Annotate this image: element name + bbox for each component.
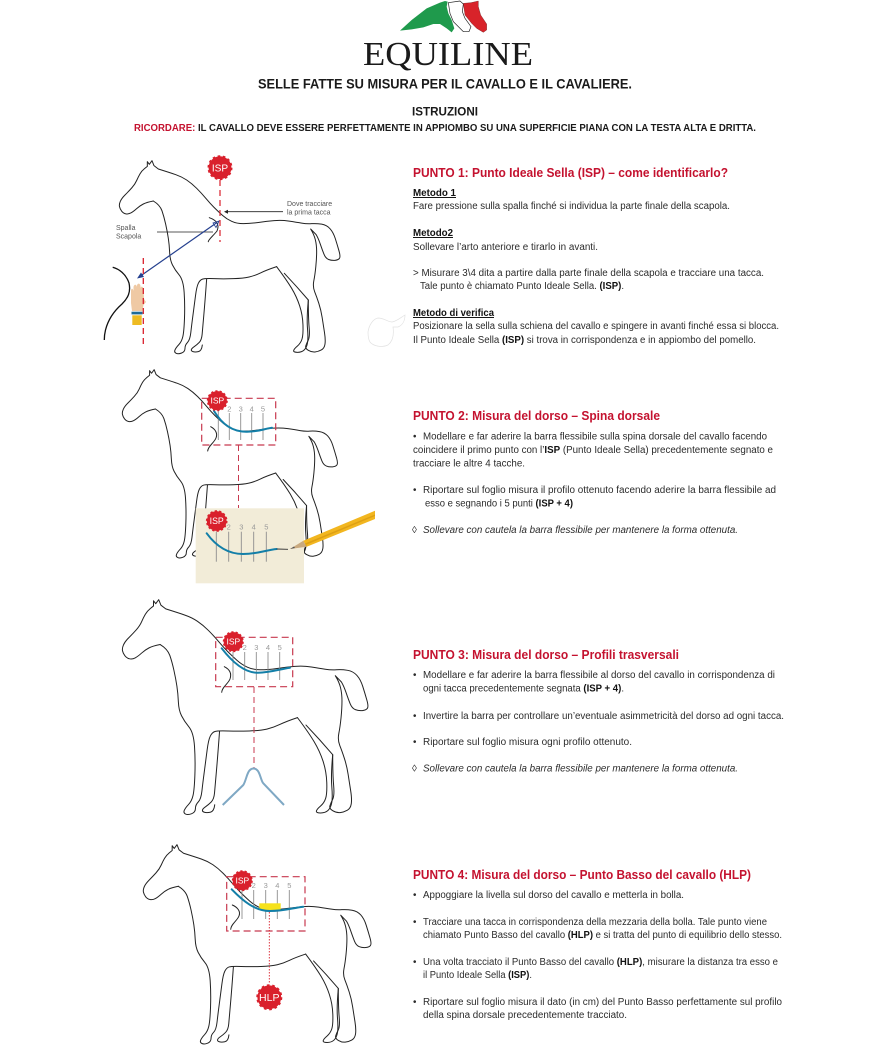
profile on paper xyxy=(207,533,277,554)
badge: ISP: ISP xyxy=(212,163,228,174)
badge: ISP: ISP xyxy=(226,637,240,647)
ticks and numbers: 2 xyxy=(243,643,247,652)
panel: punto 3 text: Riportare sul foglio misura ogni profilo ottenuto. xyxy=(423,737,632,748)
badge: ISP xyxy=(224,632,243,651)
paper ticks and numbers xyxy=(216,522,268,562)
paper ticks and numbers: 3 xyxy=(239,522,243,532)
label: shoulder: Spalla xyxy=(116,225,136,232)
flexible bar xyxy=(232,889,303,911)
ticks and numbers: 4 xyxy=(250,404,254,414)
ticks and numbers xyxy=(242,881,291,919)
horse outline xyxy=(122,370,337,558)
panel: punto 3 text xyxy=(412,647,784,775)
dashed detail box xyxy=(227,877,305,931)
scapula mark xyxy=(231,905,240,929)
ticks and numbers: 3 xyxy=(239,404,243,414)
icon: pencil xyxy=(290,511,375,549)
badge: ISP: ISP xyxy=(235,876,249,886)
panel: punto 4 text: Tracciare una tacca in corrispondenza della mezzaria della bolla. Tale punto viene xyxy=(423,917,768,928)
panel: punto 4 text: • xyxy=(413,917,417,928)
panel: punto 1 text: > Misurare 3\4 dita a partire dalla parte finale della scapola e tracciare una tacca. xyxy=(413,268,764,279)
ticks and numbers: 5 xyxy=(261,404,265,414)
title: SELLE FATTE SU MISURA PER IL CAVALLO E IL CAVALIERE. xyxy=(258,76,632,92)
shoulder leader line xyxy=(157,231,213,233)
panel: punto 3 text: • xyxy=(413,670,417,681)
scapula mark xyxy=(222,667,231,692)
panel: punto 1 text: Metodo 1 xyxy=(413,188,457,199)
wordmark: EQUILINE xyxy=(363,36,533,73)
ticks and numbers: 3 xyxy=(264,881,268,890)
ticks and numbers: 5 xyxy=(278,643,282,652)
shoulder close-up curve xyxy=(104,267,130,340)
flexible bar xyxy=(222,648,290,673)
badge: ISP xyxy=(209,156,231,179)
blue double arrow xyxy=(137,221,219,278)
flexible bar xyxy=(214,411,272,432)
panel: punto 4 text: della spina dorsale precedentemente tracciato. xyxy=(423,1010,627,1021)
ticks and numbers: 2 xyxy=(252,881,256,890)
panel: punto 1 text: Tale punto è chiamato Punto Ideale Sella. (ISP). xyxy=(420,281,624,292)
panel: punto 2 text: tracciare le altre 4 tacche. xyxy=(413,458,525,470)
panel: punto 1 text: Sollevare l’arto anteriore e tirarlo in avanti. xyxy=(413,242,598,253)
ticks and numbers: 2 xyxy=(227,404,231,414)
hand icon xyxy=(131,284,146,325)
panel: punto 2 illustration xyxy=(122,370,375,583)
badge: ISP on paper xyxy=(207,511,227,531)
panel: punto 3 text: Invertire la barra per controllare un’eventuale asimmetricità del dorso ad ogni tacca. xyxy=(423,711,784,722)
badge: ISP xyxy=(208,391,227,410)
horse outline xyxy=(119,161,340,354)
panel: punto 1 text: Posizionare la sella sulla schiena del cavallo e spingere in avanti finché essa si blocca. xyxy=(413,321,779,332)
ticks and numbers: 4 xyxy=(266,643,270,652)
panel: punto 3 text: • xyxy=(413,711,417,722)
label: first notch: Dove tracciare xyxy=(287,201,332,208)
heading: PUNTO 1: Punto Ideale Sella (ISP) – come identificarlo? xyxy=(413,165,728,180)
panel: punto 4 text: Una volta tracciato il Punto Basso del cavallo (HLP), misurare la distanza tra esso e xyxy=(423,957,779,968)
panel: punto 2 text: esso e segnando i 5 punti (ISP + 4) xyxy=(425,498,573,510)
label: shoulder: Scapola xyxy=(116,234,141,240)
panel: punto 1 text: Metodo2 xyxy=(413,228,454,239)
panel: punto 2 text: • xyxy=(413,485,417,496)
panel: punto 1 text xyxy=(413,165,779,346)
panel: punto 3 text: ogni tacca precedentemente segnata (ISP + 4). xyxy=(423,684,624,695)
panel: punto 3 text: Modellare e far aderire la barra flessibile al dorso del cavallo in corrispondenza di xyxy=(423,670,775,681)
badge: ISP: ISP xyxy=(210,396,224,406)
panel: punto 3 illustration xyxy=(122,600,368,815)
horse outline xyxy=(122,600,368,815)
heading: PUNTO 4: Misura del dorso – Punto Basso del cavallo (HLP) xyxy=(413,867,751,882)
badge: ISP xyxy=(233,871,252,890)
panel: punto 4 text: • xyxy=(413,957,417,968)
label: first notch: la prima tacca xyxy=(287,210,331,216)
ticks and numbers: 3 xyxy=(254,643,258,652)
paper sheet xyxy=(196,508,304,583)
label: first notch xyxy=(287,201,332,216)
reminder line: RICORDARE: IL CAVALLO DEVE ESSERE PERFETTAMENTE IN APPIOMBO SU UNA SUPERFICIE PIANA CON LA TESTA ALTA E DRITTA. xyxy=(134,123,756,134)
panel: punto 4 text: Appoggiare la livella sul dorso del cavallo e metterla in bolla. xyxy=(423,890,684,901)
dashed connector xyxy=(253,687,255,768)
close-up dashed line xyxy=(142,258,144,345)
badge: HLP: HLP xyxy=(259,992,280,1004)
panel: punto 4 text: • xyxy=(413,997,417,1008)
icon: saddle xyxy=(368,315,405,346)
panel: punto 2 text: Sollevare con cautela la barra flessibile per mantenere la forma ottenuta. xyxy=(423,525,738,536)
panel: punto 2 text: Modellare e far aderire la barra flessibile sulla spina dorsale del cavallo facendo xyxy=(423,432,768,442)
panel: punto 3 text: • xyxy=(413,737,417,748)
panel: punto 2 text: coincidere il primo punto con l’ISP (Punto Ideale Sella) precedentemente segnato e xyxy=(413,445,774,456)
paper ticks and numbers: 4 xyxy=(252,522,256,532)
dashed detail box xyxy=(216,637,293,687)
panel: punto 2 text: • xyxy=(413,432,417,442)
label: shoulder xyxy=(116,225,141,240)
panel: punto 3 text: ◊ xyxy=(412,764,417,775)
panel: punto 4 text xyxy=(413,867,783,1021)
icon: tricolour horse heads xyxy=(400,1,487,32)
panel: punto 1 text: Il Punto Ideale Sella (ISP) si trova in corrispondenza e in appiombo del pomello. xyxy=(413,335,756,346)
ticks and numbers xyxy=(233,643,282,680)
heading: PUNTO 3: Misura del dorso – Profili trasversali xyxy=(413,647,679,662)
panel: punto 2 text xyxy=(412,408,776,536)
panel: punto 4 text: il Punto Ideale Sella (ISP). xyxy=(423,970,532,981)
panel: punto 1 illustration xyxy=(104,156,405,354)
panel: punto 1 text: Metodo di verifica xyxy=(413,308,495,319)
vertical ISP dashed line xyxy=(219,180,221,242)
ticks and numbers xyxy=(218,404,265,440)
panel: punto 4 text: • xyxy=(413,890,417,901)
badge: ISP on paper: ISP xyxy=(210,516,224,526)
logo: Equiline horse heads and wordmark xyxy=(363,1,533,73)
dashed detail box xyxy=(202,398,276,445)
level tool xyxy=(259,903,281,910)
dotted connector xyxy=(268,912,270,983)
panel: punto 4 illustration xyxy=(143,845,371,1044)
panel: punto 2 text: Riportare sul foglio misura il profilo ottenuto facendo aderire la barra flessibile ad xyxy=(423,485,776,496)
ticks and numbers: 4 xyxy=(275,881,279,890)
badge: HLP xyxy=(257,985,281,1009)
paper ticks and numbers: 2 xyxy=(227,522,231,532)
heading: istruzioni: ISTRUZIONI xyxy=(412,106,478,118)
panel: punto 4 text: Riportare sul foglio misura il dato (in cm) del Punto Basso perfettamente sul profilo xyxy=(423,997,783,1008)
panel: punto 4 text: chiamato Punto Basso del cavallo (HLP) e si tratta del punto di equilibrio dello stesso. xyxy=(423,930,782,941)
scapula mark xyxy=(208,218,218,242)
panel: punto 2 text: ◊ xyxy=(412,525,417,536)
scapula mark xyxy=(208,427,217,451)
ticks and numbers: 5 xyxy=(287,881,291,890)
paper ticks and numbers: 5 xyxy=(264,522,268,532)
transverse profile xyxy=(223,768,284,805)
dashed connector xyxy=(238,445,240,508)
heading: PUNTO 2: Misura del dorso – Spina dorsale xyxy=(413,408,660,423)
panel: punto 1 text: Fare pressione sulla spalla finché si individua la parte finale della scapola. xyxy=(413,201,730,212)
arrow: first notch xyxy=(224,210,283,214)
horse outline xyxy=(143,845,371,1044)
panel: punto 3 text: Sollevare con cautela la barra flessibile per mantenere la forma ottenuta. xyxy=(423,764,738,775)
